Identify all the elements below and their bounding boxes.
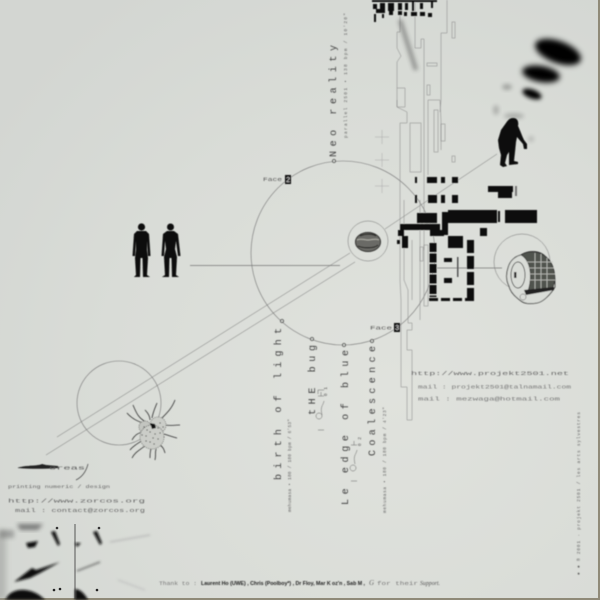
orbit circle bbox=[251, 161, 435, 345]
icon: two human figures bbox=[132, 223, 180, 277]
Face 3 label: Face bbox=[370, 324, 392, 332]
track info: birth of light: mehumasa • 180 / 180 bpm / 6'53" bbox=[287, 419, 293, 512]
Face 3 label bbox=[370, 323, 400, 333]
Face 3 label: 3 bbox=[395, 325, 399, 333]
Face 2 label: Face bbox=[263, 176, 282, 183]
track title: coalescence: Coalescence bbox=[367, 346, 379, 456]
thanks credit line bbox=[159, 579, 440, 587]
track title: birth of light: birth of light bbox=[273, 328, 285, 480]
crosshair marks bbox=[375, 130, 389, 193]
track title: le edge of blue: Le edge of blue bbox=[340, 350, 352, 505]
Face 2 label bbox=[263, 175, 291, 185]
thanks credit line: Laurent Ho (UWE) , Chris (Poolboy*) , Dr Floy, Mar K oz'n , Sab M , bbox=[201, 581, 365, 587]
track info: coalescence: mehumasa • 180 / 180 bpm / 4'23" bbox=[382, 407, 388, 513]
boreas logo bbox=[18, 464, 88, 480]
thanks credit line: Thank to : bbox=[159, 580, 197, 587]
blurred print photo bottom left bbox=[0, 524, 150, 600]
designer email: mail : contact@zorcos.org bbox=[15, 508, 145, 514]
icon: shell machine bbox=[507, 251, 555, 304]
bug track number bracket bbox=[316, 387, 329, 430]
shell machine circle bbox=[494, 234, 550, 290]
blurred ink smudges top right bbox=[400, 20, 584, 142]
second label email: mail : mezwaga@hotmail.com bbox=[418, 396, 560, 402]
boreas logo: oreas bbox=[49, 464, 85, 472]
walnut circle bbox=[348, 221, 388, 261]
blue track number bracket bbox=[350, 437, 363, 481]
long diagonal line B bbox=[46, 262, 355, 455]
copyright vertical text: ● ● ® 2001 · projekt 2501 / les arts sylvestres bbox=[575, 412, 582, 575]
blue track number bracket: 02 bbox=[357, 437, 363, 446]
Face 2 label: 2 bbox=[286, 177, 290, 185]
label email: mail : projekt2501@talnamail.com bbox=[418, 384, 571, 390]
long diagonal line A bbox=[57, 253, 350, 437]
icon: brain-like walnut bbox=[356, 232, 380, 252]
label website: http://www.projekt2501.net bbox=[411, 371, 569, 377]
line from the two figures bbox=[190, 264, 340, 266]
thanks credit line: for their bbox=[377, 580, 418, 587]
track nodes bbox=[280, 160, 374, 346]
small lower-left circle bbox=[77, 361, 161, 445]
track title: the bug: tHE bug bbox=[307, 345, 319, 415]
thanks credit line: Support. bbox=[420, 581, 440, 587]
track title: neo reality: Neo reality bbox=[328, 45, 340, 157]
icon: primate silhouette bbox=[498, 118, 527, 167]
designer website: http://www.zorcos.org bbox=[8, 498, 145, 504]
track info: neo reality: parallel 2501 • 138 bpm / 10'20" bbox=[343, 13, 349, 138]
line to primate bbox=[385, 154, 497, 229]
circuit maze black blocks bbox=[372, 0, 537, 300]
icon: spiky cell bbox=[127, 400, 180, 460]
designer credit text: printing numeric / design bbox=[8, 484, 110, 490]
bug track number bracket: 01 bbox=[323, 387, 329, 396]
circuit maze outlines bbox=[397, 0, 502, 420]
thanks credit line: G bbox=[369, 579, 374, 587]
